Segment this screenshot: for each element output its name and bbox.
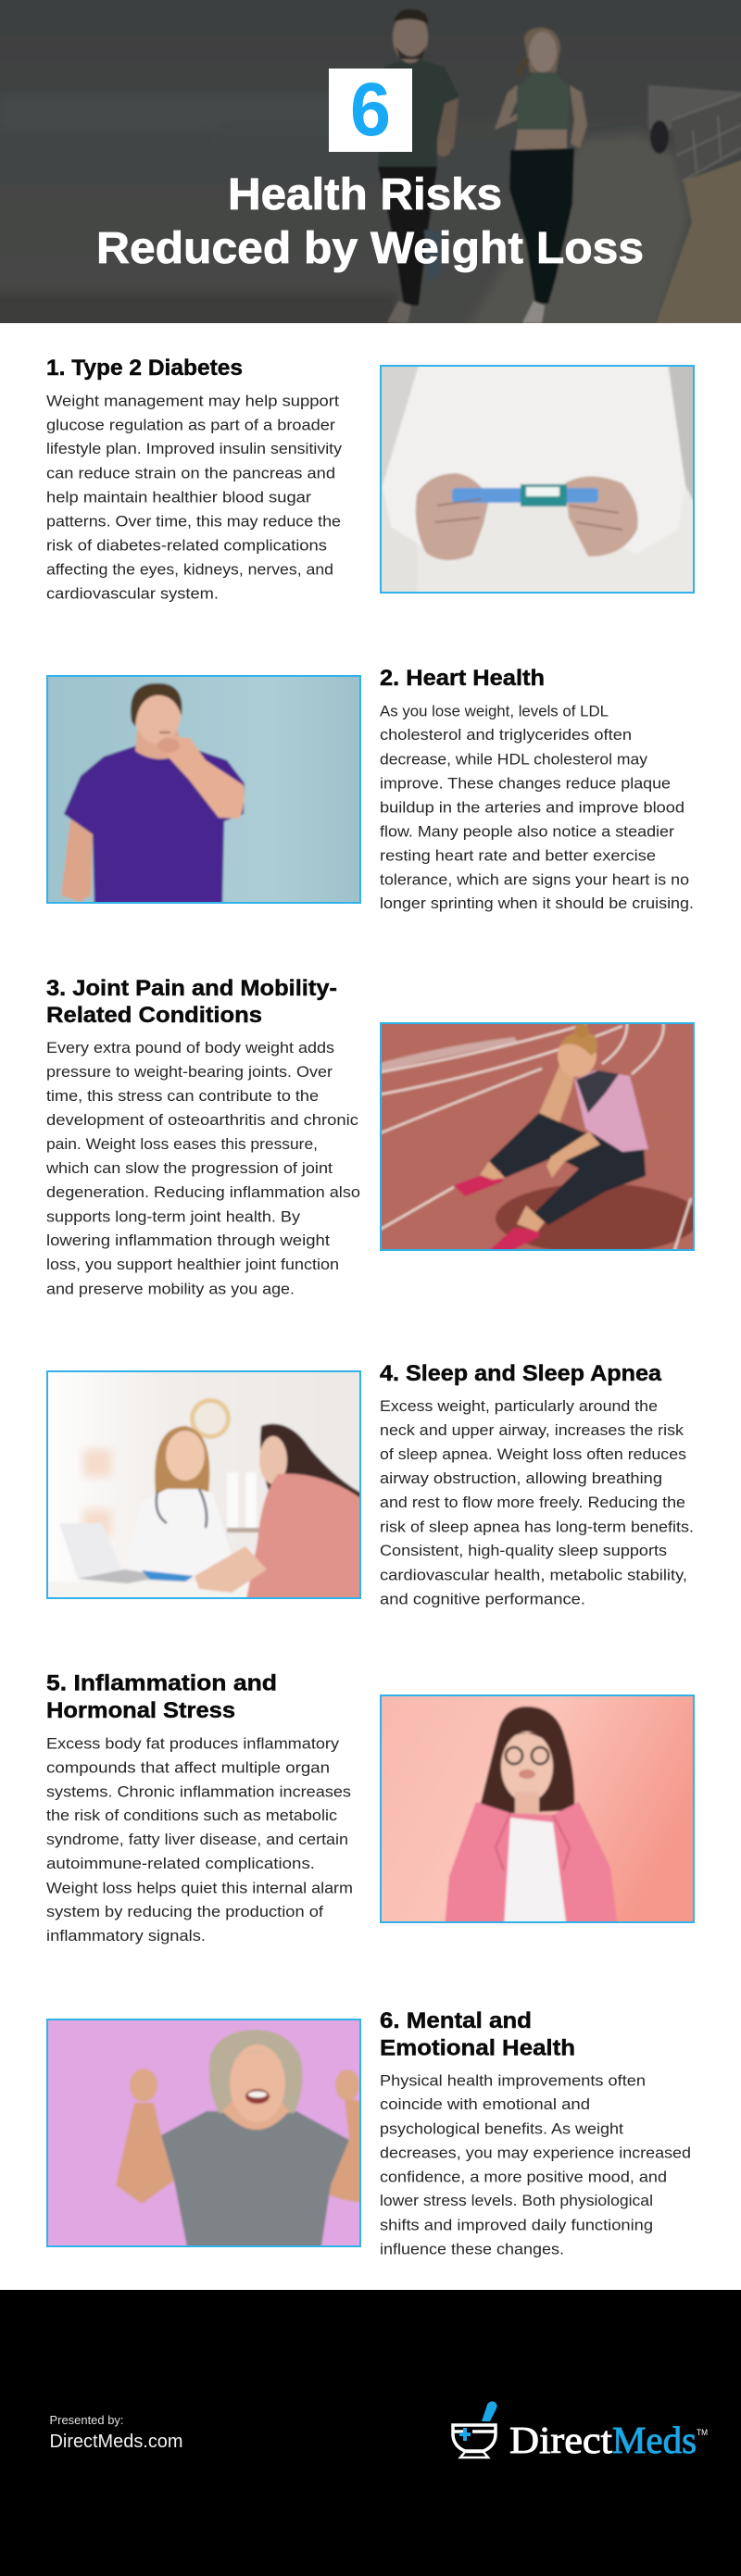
photo: doctor consulting a patient	[46, 1370, 361, 1599]
body text: flow. Many people also notice a steadier	[380, 822, 674, 840]
hero photo: runners on a seaside path	[0, 0, 741, 332]
hero banner	[0, 0, 741, 332]
body text: which can slow the progression of joint	[45, 1159, 333, 1177]
photo: man in purple shirt	[46, 675, 361, 904]
body text: time, this stress can contribute to the	[46, 1087, 319, 1105]
photo: smiling woman raising fists	[46, 2019, 361, 2247]
body text: lower stress levels. Both physiological	[380, 2192, 653, 2209]
section 1: Type 2 Diabetes	[46, 356, 704, 603]
body text: glucose regulation as part of a broader	[46, 417, 335, 433]
body text: decreases, you may experience increased	[380, 2144, 691, 2161]
body text	[380, 2071, 691, 2257]
body text	[380, 1397, 694, 1607]
heading	[380, 2008, 575, 2060]
footer	[0, 2290, 741, 2576]
section 4: Sleep and Sleep Apnea	[37, 1361, 694, 1608]
body text: airway obstruction, allowing breathing	[380, 1469, 662, 1487]
body text: and cognitive performance.	[380, 1591, 585, 1607]
body text: pain. Weight loss eases this pressure,	[46, 1135, 318, 1153]
body text: supports long-term joint health. By	[46, 1207, 301, 1225]
body text: buildup in the arteries and improve blood	[380, 799, 684, 817]
body text	[46, 1735, 353, 1945]
body text: systems. Chronic inflammation increases	[46, 1782, 351, 1800]
heading	[46, 976, 337, 1028]
body text: psychological benefits. As weight	[380, 2120, 623, 2138]
body text: lowering inflammation through weight	[46, 1232, 330, 1249]
wordmark	[509, 2419, 708, 2461]
body text: cardiovascular system.	[46, 585, 219, 602]
body text: shifts and improved daily functioning	[380, 2217, 653, 2234]
title: Health Risks	[228, 170, 502, 219]
body text: patterns. Over time, this may reduce the	[46, 513, 341, 531]
body text: inflammatory signals.	[46, 1927, 206, 1945]
body text: resting heart rate and better exercise	[380, 846, 656, 864]
heading	[46, 1670, 277, 1723]
section 5: Inflammation and Hormonal Stress	[46, 1670, 704, 1945]
presenter credit: DirectMeds.com	[50, 2432, 183, 2452]
man	[436, 97, 459, 149]
number badge	[329, 68, 412, 152]
photo: woman in pink blazer and glasses	[380, 1694, 695, 1923]
body text: decrease, while HDL cholesterol may	[380, 750, 648, 768]
wordmark: TM	[697, 2428, 708, 2437]
body text: longer sprinting when it should be cruising.	[380, 894, 694, 912]
body text: autoimmune-related complications.	[46, 1855, 315, 1872]
body text: Consistent, high-quality sleep supports	[380, 1542, 667, 1559]
woman	[524, 28, 560, 72]
body text: improve. These changes reduce plaque	[380, 774, 671, 792]
body text: of sleep apnea. Weight loss often reduces	[380, 1445, 686, 1463]
body text: compounds that affect multiple organ	[46, 1758, 330, 1776]
body text: tolerance, which are signs your heart is no	[380, 870, 689, 889]
heading: Hormonal Stress	[46, 1698, 235, 1723]
body text: syndrome, fatty liver disease, and certain	[46, 1831, 348, 1848]
photo: tired woman sitting on a running track	[380, 1022, 695, 1251]
body text: cholesterol and triglycerides often	[380, 726, 632, 744]
body text: pressure to weight-bearing joints. Over	[46, 1063, 333, 1081]
body text	[45, 1039, 360, 1297]
body text: and rest to flow more freely. Reducing the	[380, 1494, 685, 1511]
body text: degeneration. Reducing inflammation also	[46, 1183, 360, 1201]
presenter credit	[50, 2413, 183, 2452]
body text: Weight management may help support	[46, 392, 339, 409]
title	[96, 170, 644, 273]
body text: Weight loss helps quiet this internal alarm	[46, 1879, 353, 1896]
body text: influence these changes.	[380, 2241, 564, 2257]
body text: the risk of conditions such as metabolic	[46, 1807, 338, 1824]
body text: cardiovascular health, metabolic stability,	[380, 1566, 687, 1583]
heading: 4. Sleep and Sleep Apnea	[380, 1361, 661, 1386]
body text: lifestyle plan. Improved insulin sensitivity	[46, 440, 343, 457]
body text: confidence, a more positive mood, and	[380, 2168, 667, 2185]
heading: Related Conditions	[46, 1003, 262, 1028]
body text: Excess body fat produces inflammatory	[46, 1735, 340, 1752]
body text: affecting the eyes, kidneys, nerves, and	[46, 560, 333, 578]
heading: 2. Heart Health	[380, 666, 545, 691]
body text	[380, 702, 694, 912]
body text: help maintain healthier blood sugar	[46, 488, 311, 506]
section 6: Mental and Emotional Health	[37, 2008, 691, 2257]
body text: Every extra pound of body weight adds	[46, 1039, 334, 1057]
body text: coincide with emotional and	[380, 2095, 590, 2113]
heading: 1. Type 2 Diabetes	[46, 356, 243, 381]
heading: 5. Inflammation and	[46, 1670, 277, 1696]
section 2: Heart Health	[37, 666, 694, 913]
body text: development of osteoarthritis and chronic	[46, 1111, 359, 1129]
body text: Excess weight, particularly around the	[380, 1397, 658, 1415]
body text: As you lose weight, levels of LDL	[380, 702, 609, 720]
wordmark: Direct	[509, 2419, 613, 2461]
heading: Emotional Health	[380, 2035, 575, 2060]
photo: hands holding an injection pen	[380, 365, 695, 594]
section 3: Joint Pain and Mobility-Related Conditions	[45, 976, 704, 1297]
body text: loss, you support healthier joint function	[46, 1256, 339, 1273]
body text: neck and upper airway, increases the risk	[380, 1421, 684, 1439]
body text: risk of diabetes-related complications	[46, 536, 327, 554]
title: Reduced by Weight Loss	[96, 224, 644, 273]
body text: system by reducing the production of	[46, 1903, 323, 1920]
number badge: 6	[350, 68, 391, 152]
body text: risk of sleep apnea has long-term benefits.	[380, 1518, 694, 1535]
body text	[46, 392, 343, 602]
body text: can reduce strain on the pancreas and	[46, 464, 335, 481]
icon: mortar and pestle	[453, 2401, 497, 2457]
body text: Physical health improvements often	[380, 2071, 646, 2089]
body text: and preserve mobility as you age.	[46, 1280, 295, 1297]
wordmark: Meds	[612, 2419, 697, 2461]
logo	[453, 2401, 708, 2461]
heading: 6. Mental and	[380, 2008, 532, 2033]
presenter credit: Presented by:	[50, 2413, 124, 2427]
heading: 3. Joint Pain and Mobility-	[46, 976, 337, 1001]
